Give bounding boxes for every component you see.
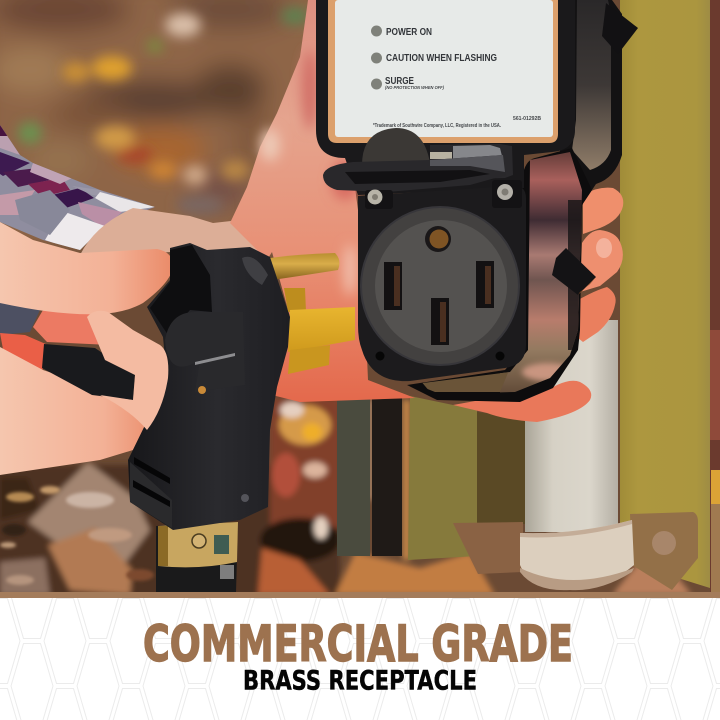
orange label border — [328, 0, 558, 143]
brown divider band — [0, 592, 720, 598]
side knobs — [552, 3, 638, 295]
left hand front finger — [87, 311, 168, 430]
receptacle cover cap — [323, 128, 513, 192]
palm highlights — [260, 50, 359, 296]
ground pin hole — [425, 226, 451, 252]
gripping fingers — [453, 188, 623, 422]
right slot — [476, 261, 494, 308]
surge protector — [316, 0, 638, 402]
upper chrome side panel — [560, 0, 622, 205]
forearm — [81, 208, 258, 253]
part number: 561-01292B — [513, 116, 541, 122]
white label — [335, 0, 553, 137]
left hand: thumb and fingers — [0, 222, 173, 475]
heading: commercial grade: COMMERCIAL GRADE — [143, 615, 573, 673]
left slot — [384, 262, 402, 310]
red fingers behind — [33, 310, 98, 344]
vent slots — [134, 457, 170, 484]
plug cord label — [156, 522, 238, 592]
indicator: caution when flashing: CAUTION WHEN FLASHING — [386, 53, 497, 64]
banner: white with hexagon pattern — [0, 598, 720, 720]
lower mirrored side panel — [407, 148, 592, 402]
indicator: power on: POWER ON — [386, 27, 432, 38]
main housing — [316, 0, 575, 195]
indicator: surge — [371, 76, 444, 90]
right hand palm — [230, 0, 415, 402]
indicator: surge: SURGE — [385, 76, 414, 87]
socket — [360, 206, 520, 366]
white conduit pipe with collar — [453, 320, 698, 590]
trademark note: *Trademark of Southwire Company, LLC, Registered in the USA. — [373, 123, 502, 129]
neutral slot — [431, 298, 449, 345]
leaf litter texture — [0, 486, 154, 585]
plaid shirt sleeve — [0, 125, 155, 250]
dark fence posts — [337, 396, 402, 556]
indicator light — [198, 386, 206, 394]
indicator: surge: (NO PROTECTION WHEN OFF) — [385, 85, 444, 90]
faceplate screws — [365, 184, 522, 209]
yellow steel post — [620, 0, 710, 588]
indicator: power on — [371, 26, 432, 36]
thumb — [0, 222, 173, 314]
plug handle lever — [42, 344, 135, 400]
subheading: brass receptacle: BRASS RECEPTACLE — [243, 666, 477, 696]
lower hand — [0, 347, 160, 475]
highlight — [195, 353, 235, 365]
wooden post — [408, 396, 525, 560]
receptacle faceplate — [358, 186, 526, 381]
plug body — [128, 243, 290, 530]
brass plug prongs — [270, 253, 355, 374]
lower sleeve — [0, 300, 40, 335]
